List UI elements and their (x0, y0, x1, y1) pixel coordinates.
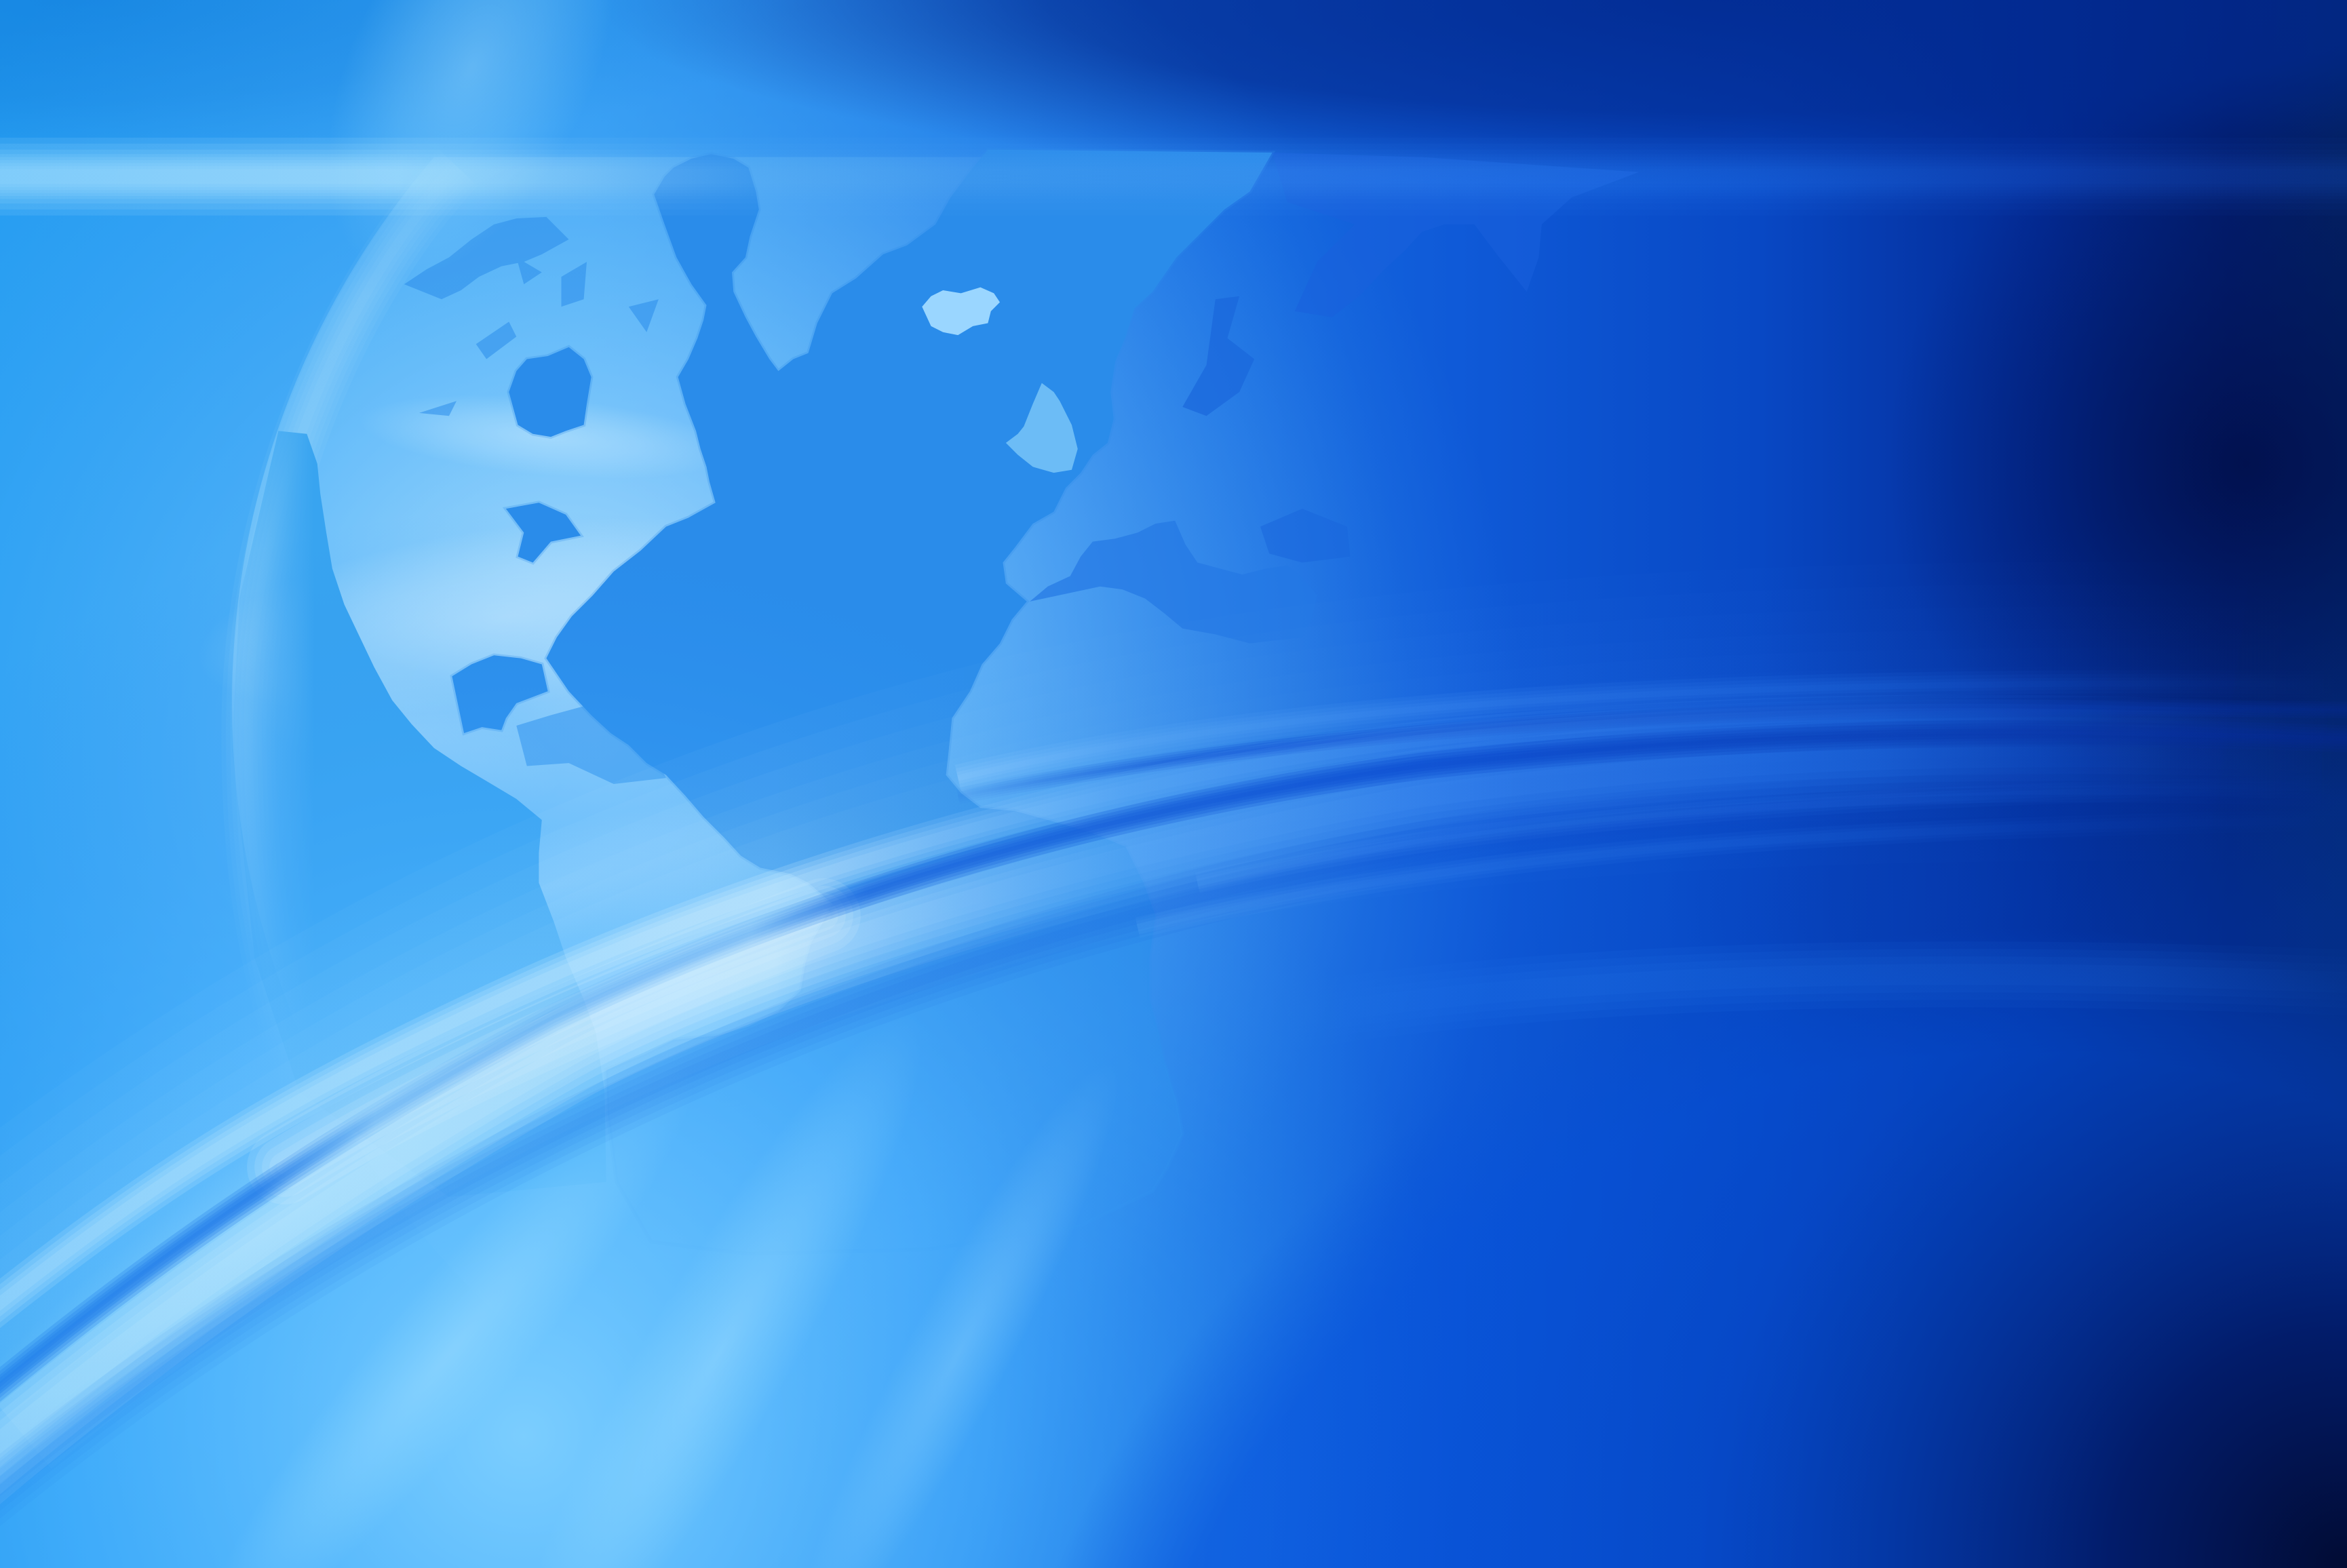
ocean: Atlantic (546, 150, 1273, 1254)
faint eastern land (1661, 770, 2080, 1025)
ribbon: lower dark (0, 798, 2347, 1526)
light rays on land (185, 382, 889, 1143)
globe rim (248, 168, 458, 1084)
sea: Arctic coast (1273, 153, 1639, 317)
ribbon: upper light (958, 684, 2347, 778)
sea: Hudson Bay (509, 347, 591, 437)
sea: Mediterranean (1030, 521, 1317, 644)
sea: Black Sea (1260, 509, 1350, 562)
island: Iceland (922, 288, 1000, 335)
islands: Arctic channels (404, 217, 659, 416)
curved ribbons (0, 684, 2347, 1526)
top left wash (0, 0, 809, 165)
ribbon: main bright (0, 756, 2347, 1481)
ribbon: core highlight (284, 916, 823, 1167)
ribbon: upper dark (958, 708, 2347, 796)
top dark wash (599, 0, 2347, 187)
globe disc (232, 157, 1894, 1541)
island: Britain (1006, 383, 1078, 473)
vertical beam over globe (254, 0, 703, 299)
sea: Baltic (1182, 296, 1254, 416)
sea: Caribbean (516, 706, 666, 784)
sea: Great Lakes (506, 503, 581, 562)
bottom rays (0, 958, 1197, 1568)
ribbon: lower band (1287, 975, 2347, 1017)
ribbon: right stripes (1138, 785, 2347, 928)
horizontal light band (0, 138, 2347, 216)
sea: Gulf of Mexico (452, 655, 548, 733)
ribbon: wide light (0, 711, 2347, 1354)
oceans and continents (232, 150, 1639, 1254)
ribbon: light over dark (0, 714, 2347, 1339)
ocean: Pacific (232, 431, 606, 1197)
ribbon: main dark (0, 733, 2347, 1422)
